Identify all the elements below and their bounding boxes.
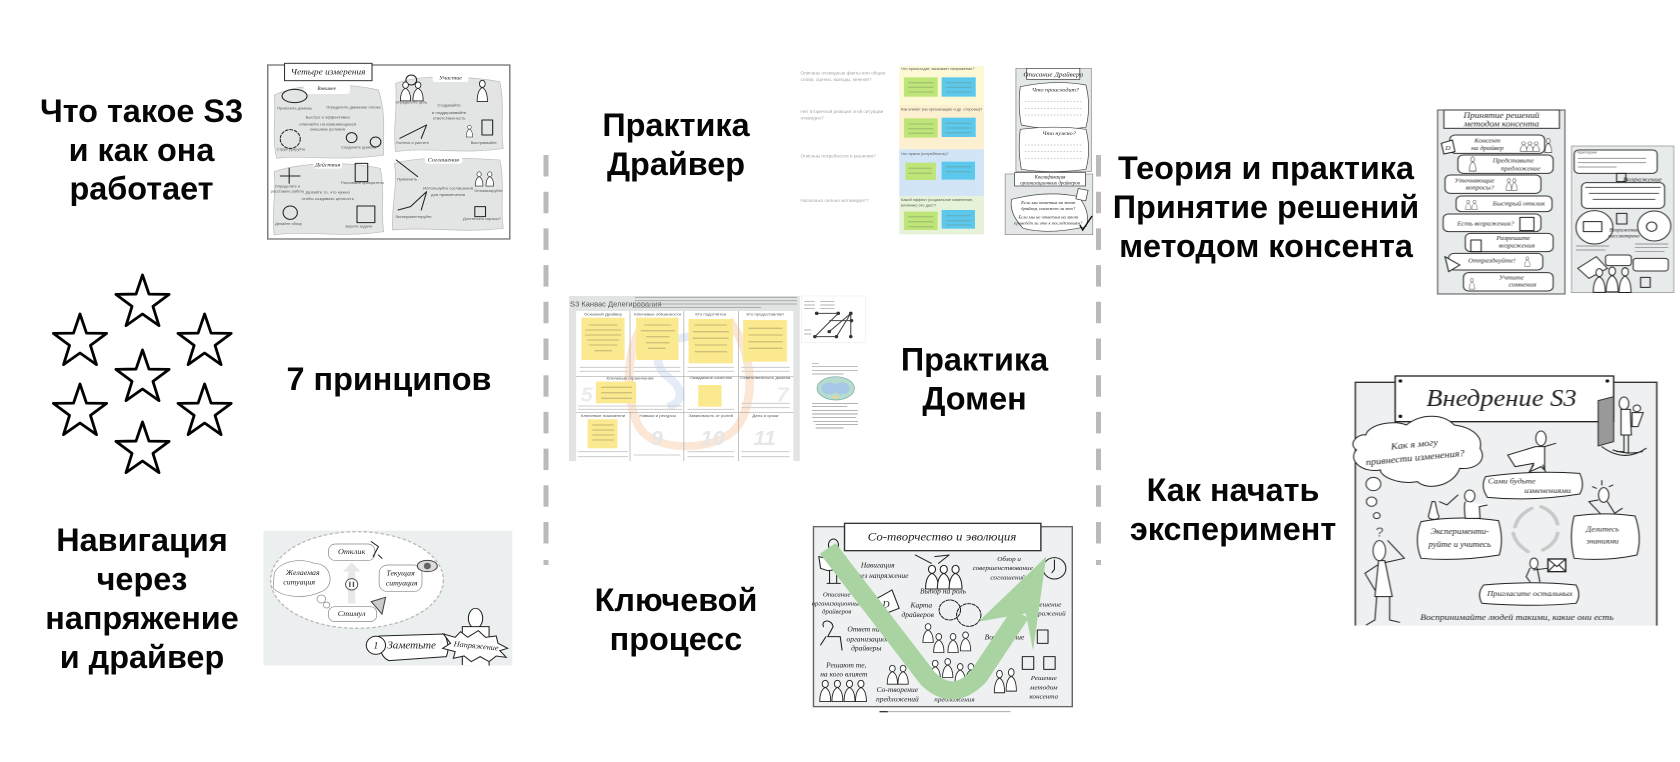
image: co-creation and evolution: Со-творчество и эволюция xyxy=(868,530,1017,544)
image: consent decision making: методом консента xyxy=(1463,119,1540,129)
driver questions table: Что нужно (потребность)? xyxy=(901,152,949,156)
divider: left dashed line xyxy=(544,155,548,545)
image: tension navigation: Отклик xyxy=(338,547,366,556)
image: four dimensions: и поддерживайте xyxy=(432,110,467,115)
image: implementing S3: знаниями xyxy=(1585,537,1619,546)
image: four dimensions: ответственность xyxy=(433,115,465,120)
image: tension navigation: 1 xyxy=(373,641,378,652)
image: co-creation and evolution: Возражение xyxy=(985,634,1025,641)
canvas: S3 delegation canvas: 11 xyxy=(753,428,776,450)
image: describing a driver sketch: приведёт ли это к последствиям? xyxy=(1014,220,1083,225)
image: co-creation and evolution: через напряжение xyxy=(851,572,909,580)
image: co-creation and evolution: организационных xyxy=(812,600,862,607)
driver questions table: Насколько сильно мотивирует? xyxy=(801,198,869,203)
image: describing a driver sketch: Квалификация xyxy=(1034,175,1066,180)
diagram: domain ellipse and notes xyxy=(812,363,858,428)
divider end: left xyxy=(544,560,548,565)
image: four dimensions: Выстраивайте xyxy=(471,141,497,145)
heading: key process: процесс xyxy=(610,621,742,657)
image: implementing S3: привнести изменения? xyxy=(1365,448,1465,468)
image: four dimensions: Берите задачи xyxy=(345,225,372,229)
canvas: S3 delegation canvas: Ключевые показатели xyxy=(581,413,626,418)
driver questions table: Описаны очевидные факты или общие xyxy=(801,71,886,76)
image: co-creation and evolution: драйверов xyxy=(902,611,935,619)
canvas: S3 delegation canvas: Кто подотчётен xyxy=(695,311,726,316)
image: describing a driver sketch xyxy=(1005,68,1093,235)
image: co-creation and evolution: драйверов xyxy=(822,608,851,615)
canvas: S3 delegation canvas: Ключевые ограничения xyxy=(607,375,653,380)
image: co-creation and evolution: Решение xyxy=(1034,602,1061,609)
image: four dimensions: Достаточно хорошо? xyxy=(463,217,501,221)
image: four dimensions: Участие xyxy=(439,75,462,81)
image: consent decision making: Уточняющие xyxy=(1455,178,1495,184)
image: four dimensions: расставьте работу xyxy=(271,190,304,194)
heading: what is S3: работает xyxy=(69,171,214,207)
image: implementing S3: руйте и учитесь xyxy=(1427,539,1491,549)
image: implementing S3: Как я могу xyxy=(1389,437,1439,452)
canvas: S3 delegation canvas: Кто предоставляет xyxy=(747,311,784,316)
image: tension navigation: Заметьте xyxy=(387,640,436,652)
driver questions table: Как влияет (на организацию и др. стороны)? xyxy=(901,107,982,111)
image: implementing S3: Сами будьте xyxy=(1488,477,1536,485)
stars: seven principles xyxy=(53,275,231,473)
image: four dimensions: Прояснить домены xyxy=(277,106,312,110)
image: four dimensions: Внешнее xyxy=(317,87,337,92)
image: consent decision making: Разрешите xyxy=(1495,235,1530,242)
image: co-creation and evolution: D xyxy=(881,600,890,610)
image: four dimensions: Четыре измерения xyxy=(291,67,365,77)
image: four dimensions: Делайте то, что нужно xyxy=(306,189,351,194)
image: implementing S3 xyxy=(1353,376,1657,626)
image: implementing S3: изменениями xyxy=(1524,486,1571,495)
image: co-creation and evolution: возражений xyxy=(1029,611,1066,618)
heading: key process: Ключевой xyxy=(595,582,757,618)
heading: theory and practice consent: методом консента xyxy=(1119,228,1414,264)
image: four dimensions: Используйте соглашения xyxy=(423,185,473,190)
image: four dimensions: Применить xyxy=(397,178,417,182)
image: consent decision making: Представьте xyxy=(1492,158,1534,164)
canvas: S3 delegation canvas: 9 xyxy=(651,428,663,450)
image: consent decision making: D xyxy=(1444,144,1451,152)
image: tension navigation: Желаемая xyxy=(285,568,320,577)
driver questions table: Нет вторичной реакции этой ситуации xyxy=(801,108,884,114)
driver questions table: влияние) это даст? xyxy=(901,203,936,207)
image: four dimensions: Структурируйте xyxy=(277,148,305,152)
image: co-creation and evolution: Обзор и xyxy=(997,556,1022,563)
image: four dimensions: Быстро и эффективно xyxy=(306,115,351,120)
heading: practice domain: Практика xyxy=(901,342,1048,378)
image: tension navigation xyxy=(263,531,512,666)
heading: what is S3: и как она xyxy=(69,132,215,168)
canvas: S3 delegation canvas: 5 xyxy=(581,384,593,406)
image: co-creation and evolution: Выбор на роль xyxy=(920,588,967,595)
image: consent details: Критерии xyxy=(1577,150,1597,154)
image: consent decision making: Учтите xyxy=(1499,275,1524,281)
image: co-creation and evolution: Описание xyxy=(823,592,851,599)
canvas: S3 delegation canvas: Ответственность домена xyxy=(740,375,791,380)
image: tension navigation: Напряжение xyxy=(452,639,499,652)
image: consent decision making: Быстрый отклик xyxy=(1492,201,1546,207)
image: co-creation and evolution xyxy=(812,523,1072,712)
image: consent decision making: сомнения xyxy=(1509,282,1536,289)
diagram: small network chart xyxy=(801,296,865,343)
heading: theory and practice consent: Теория и практика xyxy=(1118,150,1414,186)
image: implementing S3: Воспринимайте людей такими, какие они есть xyxy=(1420,612,1614,622)
image: consent decision making xyxy=(1438,110,1565,294)
canvas: S3 delegation canvas: Даты и сроки xyxy=(752,413,779,418)
image: consent decision making: на драйвер xyxy=(1471,145,1504,152)
image: tension navigation: Стимул xyxy=(338,609,366,618)
image: four dimensions: Определите и xyxy=(275,184,300,188)
driver questions table xyxy=(801,66,984,234)
image: co-creation and evolution: Навигация xyxy=(860,562,895,569)
image: co-creation and evolution: на кого влияет xyxy=(820,671,867,679)
image: co-creation and evolution: соглашений xyxy=(990,574,1026,581)
image: implementing S3: Пригласите остальных xyxy=(1486,589,1573,598)
image: describing a driver sketch: организационных драйверов xyxy=(1020,180,1081,186)
heading: practice driver: Практика xyxy=(602,107,750,143)
image: co-creation and evolution: предложения xyxy=(934,696,975,703)
image: consent details xyxy=(1572,146,1674,293)
image: consent details: Возражение xyxy=(1623,176,1662,183)
canvas: S3 delegation canvas: Навыки и ресурсы xyxy=(639,413,676,418)
heading: navigation via tension and driver: через xyxy=(97,561,187,597)
driver questions table: Какой эффект (социальное изменение, xyxy=(901,198,973,202)
heading: practice domain: Домен xyxy=(922,380,1027,416)
image: co-creation and evolution: Решают те, xyxy=(825,662,867,669)
divider end: right xyxy=(1096,560,1101,565)
image: tension navigation: ситуация xyxy=(283,578,316,587)
canvas: S3 delegation canvas: Основной Драйвер xyxy=(584,311,623,316)
image: four dimensions: Соглашения xyxy=(428,157,459,163)
image: co-creation and evolution: методом xyxy=(1029,684,1058,691)
driver questions table: очевидно? xyxy=(801,115,824,120)
image: four dimensions: для привлечения xyxy=(431,192,465,197)
heading: navigation via tension and driver: Навигация xyxy=(56,522,228,558)
image: four dimensions: Экспериментируйте xyxy=(395,215,432,219)
image: four dimensions xyxy=(268,63,510,239)
driver questions table: Что происходит, вызывает напряжение? xyxy=(901,67,975,71)
driver questions table: Описаны потребности и решения? xyxy=(801,154,876,159)
image: implementing S3: Делитесь xyxy=(1585,525,1619,534)
image: describing a driver sketch: Что происходит? xyxy=(1032,87,1079,94)
image: implementing S3: ? xyxy=(1376,525,1384,539)
image: four dimensions: Соедините домены xyxy=(341,146,377,150)
image: describing a driver sketch: Что нужно? xyxy=(1042,131,1076,137)
heading: theory and practice consent: Принятие решений xyxy=(1113,189,1419,225)
image: four dimensions: отвечайте на изменяющиеся xyxy=(299,121,356,126)
canvas: S3 delegation canvas: Ключевые обязанности xyxy=(634,311,682,316)
image: describing a driver sketch: Описание Драйвера xyxy=(1023,72,1084,78)
image: describing a driver sketch: Если мы не ответим на этот xyxy=(1017,214,1079,219)
image: four dimensions: Создавайте xyxy=(437,103,462,108)
canvas: S3 delegation canvas: 10 xyxy=(701,428,725,450)
image: four dimensions: чтобы создавать ценность xyxy=(302,196,354,201)
image: consent decision making: Консент xyxy=(1473,138,1501,144)
image: four dimensions: Оптимизируйте xyxy=(474,189,502,193)
canvas: S3 delegation canvas: S3 Канвас Делегирования xyxy=(570,300,662,309)
heading: seven principles: 7 принципов xyxy=(287,361,491,397)
canvas: S3 delegation canvas: Зависимость от ролей xyxy=(689,413,734,418)
driver questions table: слова, оценки, выводы, мнения? xyxy=(801,77,872,82)
canvas: S3 delegation canvas: Ожидаемое качество xyxy=(690,375,733,380)
divider: right dashed line xyxy=(1096,155,1101,545)
image: describing a driver sketch: драйвер, поможет ли это? xyxy=(1021,206,1076,212)
image: co-creation and evolution: консента xyxy=(1029,694,1059,701)
image: co-creation and evolution: совершенствование xyxy=(973,565,1033,572)
image: co-creation and evolution: Решение xyxy=(1030,675,1057,682)
image: co-creation and evolution: организационные xyxy=(846,636,903,643)
image: consent decision making: Есть возражения? xyxy=(1456,221,1515,227)
image: four dimensions: Определите движение потока xyxy=(326,105,381,109)
image: four dimensions: Определите цель xyxy=(395,100,427,104)
image: consent decision making: Принятие решений xyxy=(1462,110,1540,120)
canvas: S3 delegation canvas: 7 xyxy=(777,384,790,406)
heading: navigation via tension and driver: напряжение xyxy=(45,600,239,636)
image: co-creation and evolution: Со-творение xyxy=(877,686,919,694)
image: co-creation and evolution: Ответ на xyxy=(847,626,880,634)
image: describing a driver sketch: Если мы ответим на этот xyxy=(1020,200,1076,205)
image: four dimensions: Делайте обзор xyxy=(275,222,302,226)
image: four dimensions: Учитесь и растите xyxy=(396,141,429,145)
image: consent decision making: возражения xyxy=(1499,243,1535,249)
heading: what is S3: Что такое S3 xyxy=(40,93,243,129)
heading: navigation via tension and driver: и драйвер xyxy=(60,639,224,675)
image: tension navigation: ситуация xyxy=(386,579,418,588)
image: four dimensions: Расставьте приоритеты xyxy=(341,181,384,185)
image: implementing S3: Внедрение S3 xyxy=(1426,385,1577,412)
canvas: S3 delegation canvas xyxy=(569,296,800,461)
image: consent decision making: предложение xyxy=(1501,166,1540,172)
image: four dimensions: Действия xyxy=(314,161,341,168)
image: consent details: Возражение xyxy=(1609,228,1639,234)
image: consent decision making: Отпразднуйте! xyxy=(1468,258,1516,265)
image: co-creation and evolution: Карта xyxy=(909,602,932,609)
heading: how to start an experiment: Как начать xyxy=(1147,472,1319,508)
image: co-creation and evolution: предложений xyxy=(876,696,919,703)
heading: how to start an experiment: эксперимент xyxy=(1130,511,1336,547)
image: consent details: рассмотрено xyxy=(1607,234,1640,239)
image: tension navigation: Текущая xyxy=(386,569,415,578)
image: consent decision making: вопросы? xyxy=(1466,185,1495,192)
image: four dimensions: внешние условия xyxy=(310,127,345,132)
image: co-creation and evolution: драйверы xyxy=(851,645,882,653)
image: implementing S3: Эксперименти- xyxy=(1431,526,1489,536)
image: co-creation and evolution: Улучшение xyxy=(938,687,971,694)
heading: practice driver: Драйвер xyxy=(607,146,745,182)
